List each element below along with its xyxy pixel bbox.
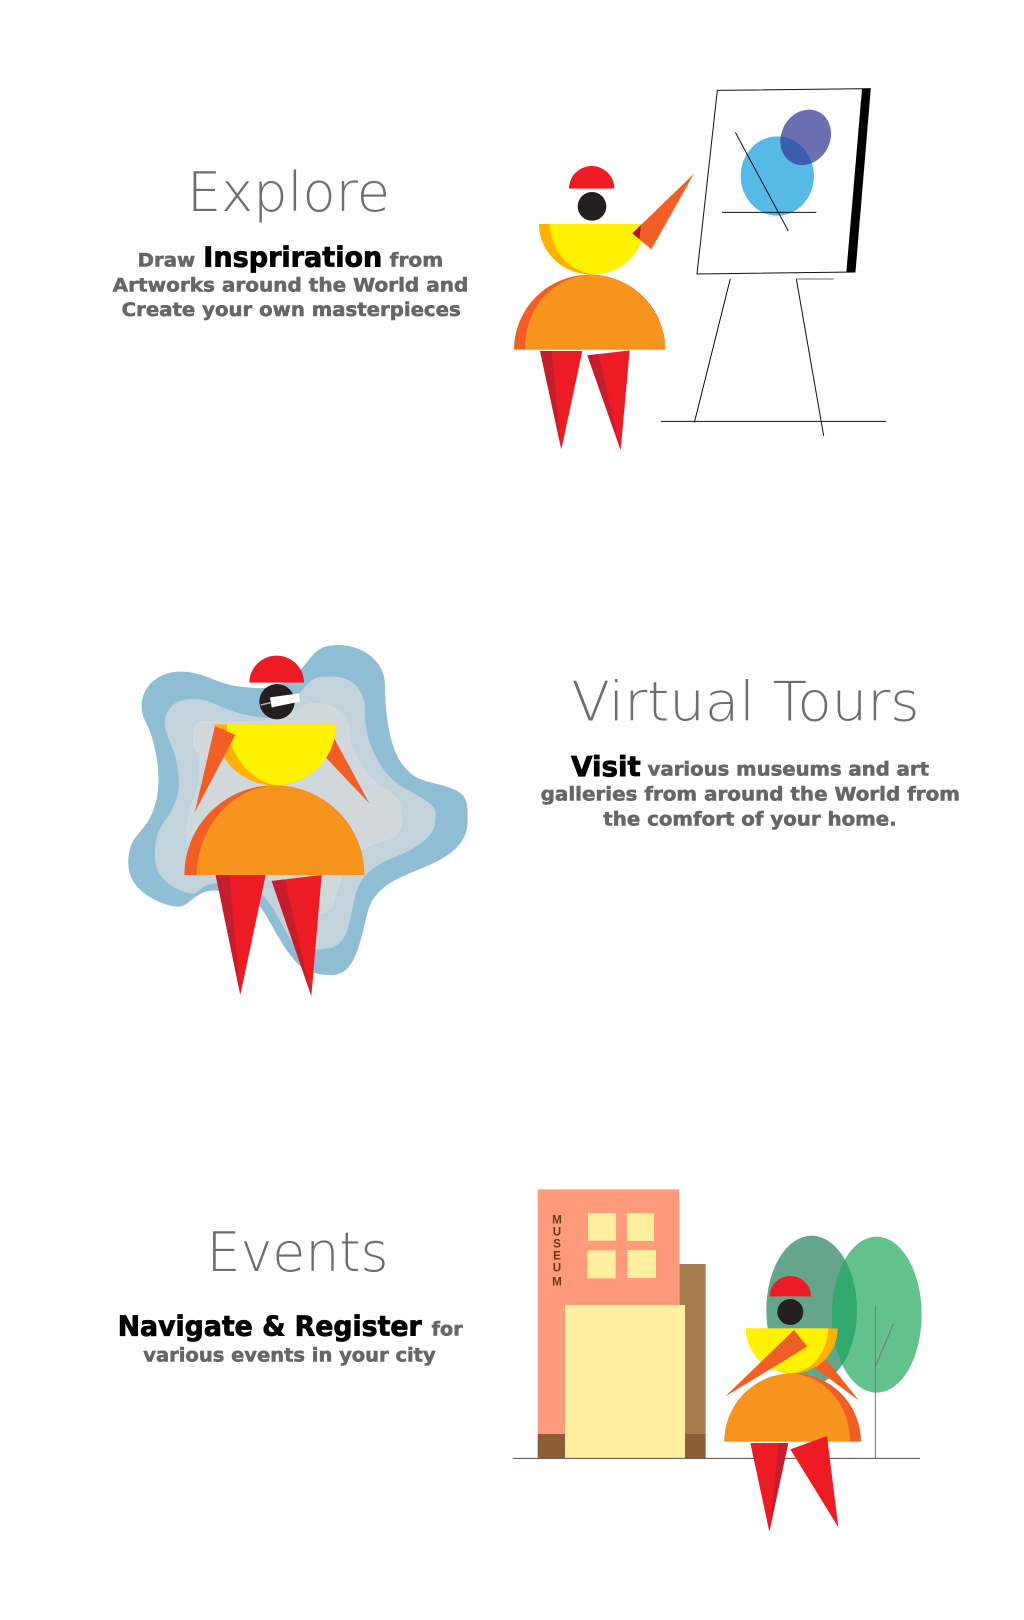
text block: explore description	[113, 242, 468, 321]
text block: virtual tours description: galleries from around the World from	[541, 785, 960, 806]
heading: Events: Events	[206, 1221, 388, 1284]
text block: explore description: Draw	[138, 251, 195, 272]
text block: virtual tours description: Visit	[571, 751, 641, 783]
text block: explore description: Artworks around the World and	[113, 276, 468, 297]
text block: virtual tours description: various museums and art	[648, 759, 929, 780]
panel: virtual tours text	[541, 671, 960, 831]
figure	[184, 656, 369, 996]
illustration: figure with blue blob	[128, 645, 468, 996]
heading: Explore: Explore	[187, 161, 390, 224]
museum building: S	[553, 1238, 561, 1251]
illustration: figure at museum	[513, 1189, 922, 1532]
easel	[661, 89, 886, 436]
museum building: M	[552, 1276, 562, 1289]
panel: explore text	[113, 161, 468, 321]
trees	[766, 1236, 922, 1458]
text block: events description: Navigate & Register	[118, 1311, 422, 1343]
text block: events description: various events in your city	[143, 1346, 436, 1367]
text block: events description	[118, 1311, 464, 1367]
ground line	[513, 1457, 920, 1460]
text block: virtual tours description: the comfort of your home.	[603, 810, 897, 831]
figure	[724, 1276, 861, 1532]
blob background	[128, 645, 468, 975]
text block: explore description: from	[390, 251, 443, 272]
illustration: figure pointing at easel	[514, 89, 886, 450]
panel: events text	[118, 1221, 464, 1367]
text block: virtual tours description	[541, 751, 960, 831]
text block: events description: for	[432, 1320, 464, 1341]
museum building: E	[553, 1250, 561, 1263]
text block: explore description: Inspriration	[203, 242, 382, 274]
heading: Virtual Tours: Virtual Tours	[572, 671, 920, 734]
figure	[514, 166, 694, 450]
museum building: M	[552, 1213, 562, 1226]
museum building: U	[553, 1225, 561, 1238]
museum building	[538, 1189, 706, 1458]
text block: explore description: Create your own masterpieces	[122, 300, 461, 321]
museum building: U	[553, 1262, 561, 1275]
